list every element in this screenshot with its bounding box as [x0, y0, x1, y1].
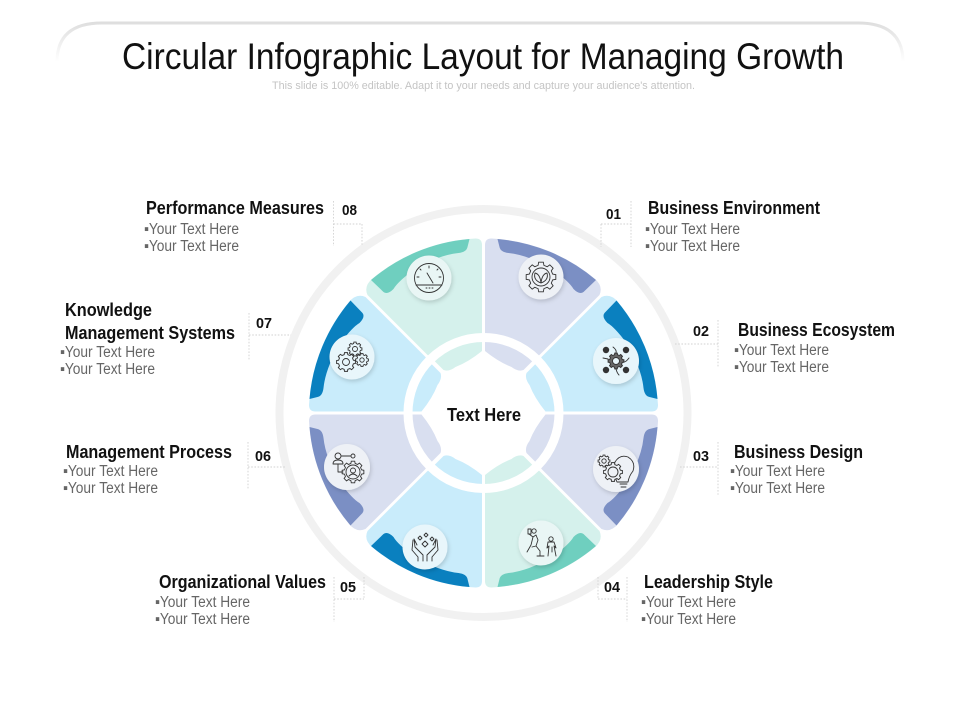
panel: segment 04: [485, 455, 601, 588]
label 02: 02: [693, 323, 709, 340]
label 05: ▪Your Text Here: [155, 611, 250, 628]
label 04: 04: [604, 579, 621, 596]
label 04: ▪Your Text Here: [641, 594, 736, 611]
label 07: Knowledge: [65, 299, 152, 320]
title: Circular Infographic Layout for Managing Growth: [122, 36, 844, 77]
connector 05: [334, 577, 364, 622]
icon: network of coins (02): [593, 338, 639, 384]
label 05: [155, 571, 356, 628]
panel: segment 07: [309, 296, 441, 412]
label 07: ▪Your Text Here: [60, 361, 155, 378]
connector 06: [248, 442, 286, 490]
label 05: 05: [340, 579, 356, 596]
panel: segment 06: [309, 414, 441, 530]
accent bar 05: [371, 533, 470, 587]
connector 03: [680, 442, 718, 495]
outer ring: [280, 209, 688, 617]
accent bar 04: [498, 533, 596, 587]
panel: segment 05: [366, 455, 482, 588]
accent bar 07: [310, 300, 364, 399]
label 01: ▪Your Text Here: [645, 238, 740, 255]
panel: segment 03: [526, 414, 658, 530]
label 03: Business Design: [734, 441, 863, 462]
accent bar 08: [371, 239, 470, 293]
label 04: Leadership Style: [644, 571, 773, 592]
label 06: Management Process: [66, 441, 232, 462]
connector 04: [598, 577, 627, 622]
label 08: 08: [342, 202, 357, 219]
label 06: 06: [255, 448, 271, 465]
label 02: ▪Your Text Here: [734, 342, 829, 359]
label 01: 01: [606, 206, 621, 223]
center label: Text Here: [447, 404, 521, 425]
label 03: ▪Your Text Here: [730, 463, 825, 480]
label 07: 07: [256, 315, 272, 332]
label 04: ▪Your Text Here: [641, 611, 736, 628]
accent bar 06: [310, 427, 364, 526]
label 01: Business Environment: [648, 197, 820, 218]
white inner ring: [408, 338, 559, 488]
label 02: ▪Your Text Here: [734, 359, 829, 376]
label 01: [606, 197, 820, 255]
label 03: 03: [693, 448, 709, 465]
connector 01: [601, 201, 631, 247]
label 08: Performance Measures: [146, 197, 324, 218]
label 06: [63, 441, 271, 497]
label 02: Business Ecosystem: [738, 319, 895, 340]
panel: segment 08: [366, 238, 482, 371]
label 04: [604, 571, 773, 628]
label 03: [693, 441, 863, 497]
label 07: [60, 299, 272, 378]
icon: hands with stars (05): [402, 524, 448, 570]
label 08: [144, 197, 357, 255]
connector 08: [334, 201, 362, 246]
accent bar 01: [498, 239, 596, 293]
connector 07: [249, 313, 291, 360]
label 02: [693, 319, 895, 376]
icon: gear with leaf (01): [518, 254, 564, 300]
subtitle: This slide is 100% editable. Adapt it to your needs and capture your audience's attention.: [272, 80, 695, 92]
connector 02: [675, 320, 718, 367]
label 06: ▪Your Text Here: [63, 463, 158, 480]
label 01: ▪Your Text Here: [645, 221, 740, 238]
icon: three gears (07): [330, 334, 374, 380]
icon: gear and light bulb (03): [593, 446, 639, 492]
panel: segment 01: [485, 238, 601, 371]
label 05: Organizational Values: [159, 571, 326, 592]
icon: leader with flag (04): [518, 520, 564, 566]
label 03: ▪Your Text Here: [730, 480, 825, 497]
label 08: ▪Your Text Here: [144, 221, 239, 238]
label 07: Management Systems: [65, 322, 235, 343]
accent bar 03: [604, 427, 658, 526]
icon: gauge (08): [406, 256, 452, 300]
accent bar 02: [604, 300, 658, 399]
icon: people network gear (06): [324, 444, 370, 490]
label 05: ▪Your Text Here: [155, 594, 250, 611]
label 07: ▪Your Text Here: [60, 344, 155, 361]
label 08: ▪Your Text Here: [144, 238, 239, 255]
label 06: ▪Your Text Here: [63, 480, 158, 497]
top frame: [57, 23, 903, 62]
panel: segment 02: [526, 296, 658, 412]
